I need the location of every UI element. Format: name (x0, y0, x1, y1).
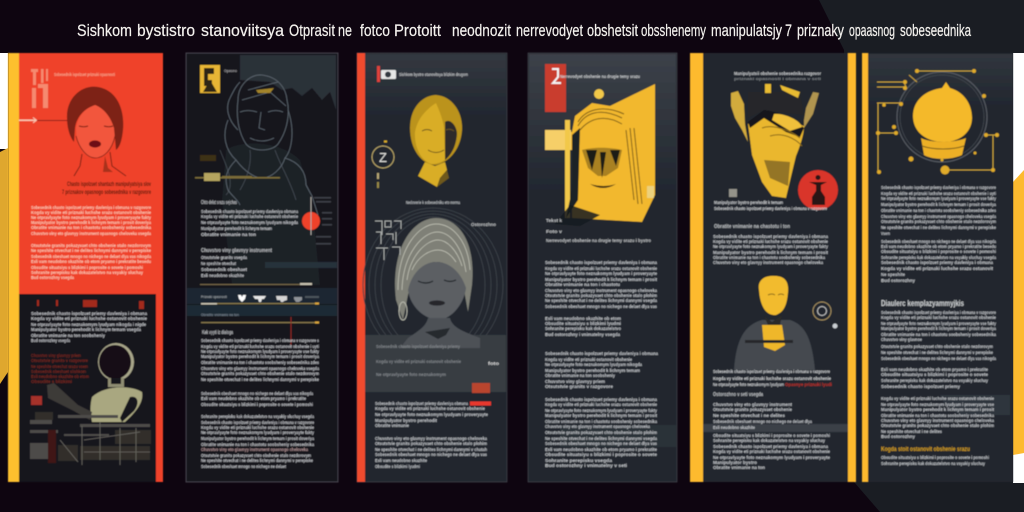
illustration: woman portrait (67, 87, 126, 176)
panel 5 caption: Manipulyator bystro perehodit k temam (714, 200, 783, 206)
panel 1 text block: Manipulyator bystro perehodit k lichnym temam i prosit doveriya (31, 220, 151, 226)
panel 5 lower text block: Esli neudobno skazhite (713, 425, 755, 431)
panel 1 red text block: Otsutstvie granits v razgovore (31, 358, 88, 364)
panel 5 lower text block: Ne otpravlyayte foto neznakomym lyudyam i proveryayte (713, 455, 830, 461)
panel 6 text block top: Otsutstvie granits pokazyvaet chto obshenie stalo nezdorovym (881, 219, 996, 225)
panel 1 dark text block: Obratite vnimanie na ton soobsheniy (31, 333, 105, 339)
panel 3 text block: Ne otpravlyayte foto neznakomym lyudyam i proveryayte (375, 412, 488, 418)
yellow glitch band (195, 155, 280, 181)
panel 2 subheading two: Chuvstvo viny glavnyy instrument (201, 248, 272, 254)
panel 2 article text: Obsudite situatsiyu s blizkimi i poprosite o sovete i pomoshi (201, 402, 313, 408)
panel 2 article text: Sobesednik chasto ispolzuet priemy davleniya i obmana v razgovore s (201, 338, 319, 344)
panel 2 article text: Sobesednik obeshaet mnogo no nichego ne delaet (201, 464, 286, 470)
panel 6 text block top: Ne speshite otvechat i ne delites lichnymi dannymi v perepiske (881, 225, 996, 231)
panel 5 header text: Manipulyatsii obshenie sobesednika razgovor (734, 71, 821, 76)
panel 4 text block: Chuvstvo viny eto glavnyy instrument opasnogo cheloveka (545, 424, 650, 430)
icon: red banner with symbol (545, 64, 566, 112)
panel 1 text block: Sobesednik obeshaet mnogo no nichego ne delaet dlya vas nikogda (31, 254, 151, 260)
title: fotco (360, 21, 390, 40)
panel 4 text block: Esli vam neudobno skazhite ob etom (545, 316, 621, 322)
panel 4 text block: Ne speshite otvechat i ne delites lichnymi dannymi vsegda (545, 298, 657, 304)
title: priznaky (797, 21, 844, 40)
background diagonal shape (819, 0, 1024, 512)
panel 3 text block (375, 401, 488, 470)
panel 2 article text: Esli vam neudobno skazhite ob etom pryamo i prekratite (201, 396, 306, 402)
panel 6 text block top: Bud ostorozhny (881, 278, 915, 284)
panel 3 header text: Sishkom bystro stanovitsya blizkim drugom (399, 72, 468, 77)
panel 6 text block bottom: Sohranite perepisku kak dokazatelstvo na vsyakiy sluchay (881, 378, 988, 384)
panel 1 dark text block: Bud ostorozhny vsegda (31, 338, 70, 344)
panel 2 article text: Sohranite perepisku kak dokazatelstvo na vsyakiy sluchay vsegda (201, 414, 314, 420)
illustration: yellow face (410, 95, 462, 187)
panel 4 text block (545, 260, 658, 469)
icon: pale logo (31, 69, 48, 108)
panel 1 red text block: Sobesednik obeshaet slishkom (31, 369, 86, 375)
panel 4 text block: Kogda vy vidite eti priznaki luchshe srazu ostanovit obshenie (545, 266, 657, 272)
panel 2 article text: Sobesednik chasto ispolzuet priemy davleniya i obmana v razgovore (201, 420, 314, 426)
panel 3: two portraits (357, 53, 507, 482)
panel 5 lower text block (713, 402, 830, 471)
panel 1 red text block: Chuvstvo viny glavnyy priem (31, 353, 81, 359)
panel 4 caption (546, 218, 651, 243)
panel 5 text block (713, 234, 828, 266)
panel 2 heading: Kak vyyti iz dialoga (202, 330, 234, 336)
panel 2 article text: Manipulyator bystro perehodit k lichnym temam i prosit doveriya (201, 354, 319, 360)
panel 1 dark text block (31, 311, 147, 344)
panel 5 lower text block: Chuvstvo viny eto glavnyy instrument (713, 402, 792, 408)
panel 1 header text: Sobesednik ispolzuet priznaki opasnosti (54, 72, 115, 77)
panel 1 dark text block: Kogda vy vidite eti priznaki luchshe ostanovit obshenie (31, 316, 147, 322)
panel 1 text block: Ne otpravlyayte foto neznakomym lyudyam i proveryayte fakty (31, 215, 151, 221)
panel 5 lower text block: Kogda vy vidite eti priznaki luchshe srazu ostanovit obshenie (713, 449, 830, 455)
panel 6 text block bottom: Ne speshite otvechat i ne delites lichnymi dannymi v perepiske (881, 350, 993, 356)
panel 2 article text: Ne otpravlyayte foto neznakomym lyudyam i proveryayte fakty (201, 430, 314, 436)
panel 2 text block: Ne otpravlyayte foto neznakomym lyudyam nikogda (201, 220, 298, 226)
panel 1 lower dark section (19, 294, 156, 482)
panel 3 text block: Sobesednik obeshaet mnogo no nichego ne delaet dlya vas (375, 452, 487, 458)
panel 6: lightbulb circuit (862, 53, 1013, 482)
title: sobeseednika (900, 21, 971, 40)
panel 1 text block: Otsutstvie granits pokazyvaet chto obshenie stalo nezdorovym (31, 243, 151, 249)
portrait overlay text: Kogda vy vidite eti priznaki ostanovit obshenie (376, 359, 462, 364)
panel 2 article text: Ne otpravlyayte foto neznakomym lyudyam i proveryayte vse fakty (201, 349, 319, 355)
panel 3 text block: Otsutstvie granits pokazyvaet chto obshenie stalo plohim (375, 441, 487, 447)
portrait overlay text (376, 344, 500, 377)
title: Sishkom (77, 21, 132, 40)
panel 6 text block bottom: Otsutstvie granits pokazyvaet chto obshenie stalo plohim (881, 423, 994, 429)
panel 5 text block: Ne otpravlyayte foto neznakomym lyudyam i proveryayte fakty (713, 244, 828, 250)
panel 3 text block: Sobesednik chasto ispolzuet priemy davleniya obmana (375, 401, 468, 407)
panel 2 text block: Manipulyator perehodit k lichnym temam (201, 226, 272, 232)
red highlight (470, 402, 491, 406)
panel 4: yellow collage (528, 53, 677, 482)
panel 4 text block: Manipulyator bystro perehodit k lichnym temam (545, 368, 640, 374)
panel 1 heading (62, 182, 151, 196)
panel 6 text block bottom: Sobesednik chasto ispolzuet priemy (881, 384, 960, 390)
panel 4 text block: Obratite vnimanie na ton i chastotu soobsheniy sobesednika (545, 419, 657, 425)
panel 4 text block: Ne otpravlyayte foto neznakomym lyudyam nikogda (545, 362, 642, 368)
panel 5 text block: Sobesednik chasto ispolzuet priemy davleniya i obmana (713, 234, 828, 240)
title: 7 (785, 21, 792, 40)
panel 5 lower text block: Ne speshite otvechat i ne delites (713, 413, 785, 419)
panel 2 short text: Ne speshite otvechat (201, 261, 236, 267)
panel 5 lower text block: Sobesednik obeshaet mnogo no nichego ne delaet dlya (713, 419, 812, 425)
panel 5 lower text block: Otsutstvie granits pokazyvaet obshenie (713, 407, 792, 413)
title: obsshenemy (641, 21, 706, 40)
panel 4 caption: Foto v (546, 229, 563, 234)
panel 5 caption: Sobesednik chasto ispolzuet priemy davleniya i obmana v razgovore (714, 206, 827, 212)
panel 1 red text block: Esli neudobno skazhite ob etom (31, 374, 89, 380)
panel 4 text block: Otsutstvie granits v razgovore (545, 384, 613, 390)
panel 6 text block bottom: Manipulyator bystro perehodit k lichnym temam i prosit (881, 407, 994, 413)
panel 6 text block top: Kogda vy vidite eti priznaki luchshe srazu ostanovit (881, 266, 993, 272)
panel 5 lower text block: Sobesednik chasto ispolzuet priemy davleniya i obmana (713, 444, 828, 450)
right edge decoration (1013, 53, 1024, 483)
illustration: bulb with circuit lines (876, 69, 999, 174)
panel 4 text block: Manipulyator bystro perehodit k lichnym temam i prosit (545, 277, 657, 283)
panel 5 lower caption: Opasnye priznaki lyudi (785, 382, 832, 388)
panel 6 text block top (881, 185, 996, 284)
panel 2 text block: Sobesednik chasto ispolzuet priemy davleniya obmana (201, 209, 298, 215)
panel 1 text block: Ne speshite otvechat i ne delites lichnymi dannymi v perepiske (31, 248, 151, 254)
grey band (703, 424, 848, 432)
panel 5 lower caption: Kogda vy vidite eti priznaki luchshe srazu ostanovit obshenie (713, 376, 831, 382)
panel 4 text block: Manipulyator bystro perehodit k lichnym temam i prosit (545, 413, 657, 419)
panel 5 lower text block: Obsudite situatsiyu s blizkimi i poprosite o sovete i pomoshi (713, 433, 830, 439)
title: bystistro (137, 21, 195, 40)
panel 4 text block: Obsudite situatsiyu s blizkimi lyudmi (545, 321, 621, 327)
panel 3 text block: Obratite vnimanie (375, 423, 409, 429)
panel 2 article text: Ne speshite otvechat i ne delites lichnymi dannymi v perepiske (201, 458, 313, 464)
panel 3 text block: Manipulyator bystro perehodit (375, 418, 437, 424)
portrait side label: Ostorozhno (471, 222, 496, 227)
panel 2 article text: Ne speshite otvechat i ne delites lichnymi dannymi v perepiske (201, 377, 319, 383)
panel 4 text block: Otsutstvie granits pokazyvaet chto obshenie stalo plohim (545, 293, 657, 299)
title: Protoitt (394, 21, 441, 40)
panel 4 text block: Sobesednik chasto ispolzuet priemy davleniya i obmana (545, 260, 657, 266)
panel 2 short text (201, 255, 247, 279)
panel 2 small label: Opasno (224, 68, 237, 73)
panel 1 text block: Sobesednik chasto ispolzuet priemy davleniya i obmana v razgovore (31, 205, 151, 211)
panel 3 text block: Obsudite s blizkimi lyudmi (375, 464, 420, 470)
panel 6 text block top: Obsudite situatsiyu s blizkimi i poprosite o sovete i pomoshi (881, 249, 996, 255)
panel 3 text block: Chuvstvo viny eto glavnyy instrument opasnogo cheloveka (375, 436, 487, 442)
panel 1: red portrait (8, 53, 163, 482)
panel 1 text block: Esli vam neudobno skazhite ob etom pryamo i prekratite besedu (31, 259, 151, 265)
title: Otprasit (289, 21, 335, 40)
panel 1 red text block (31, 353, 89, 385)
title: ne (338, 21, 352, 40)
illustration: masked head (731, 84, 819, 198)
panel 4 text block: Chuvstvo viny eto glavnyy instrument opasnogo cheloveka (545, 288, 657, 294)
panel 4 text block: Sobesednik obeshaet mnogo no nichego ne delaet dlya vas (545, 441, 657, 447)
panel 4 text block: Ne otpravlyayte foto neznakomym lyudyam i proveryayte (545, 271, 657, 277)
red target marker (302, 197, 332, 244)
panel 6 text block bottom: Kogda vy vidite eti priznaki luchshe srazu ostanovit obshenie (881, 315, 996, 321)
panel 4 text block: Sobesednik obeshaet mnogo no nichego ne delaet dlya vas (545, 304, 657, 310)
panel 5 text block: Obratite vnimanie na ton i chastotu soobsheniy sobesednika (713, 255, 825, 261)
panel 5 text block: Chuvstvo viny eto glavnyy instrument opasnogo cheloveka (713, 260, 823, 266)
panel 6 text block bottom: Chuvstvo viny glavnoe (881, 337, 922, 343)
panel 4 text block: Ne speshite otvechat i ne delites lichnymi dannymi vsegda (545, 436, 657, 442)
panel 4 text block: Ne otpravlyayte foto neznakomym lyudyam i proveryayte fakty (545, 408, 657, 414)
panel 2 article text: Otsutstvie granits pokazyvaet chto obshenie stalo nezdorovym (201, 371, 319, 377)
illustration: collage face (545, 84, 655, 226)
panel 2 short text: Sobesednik obeshaet (201, 267, 247, 273)
panel 3 text block: Ne speshite otvechat i ne delites lichnymi dannymi v chatah (375, 447, 487, 453)
panel 5 subheading: Obratite vnimanie na chastotu i ton (714, 224, 790, 230)
panel 1 dark text block: Manipulyator bystro perehodit k lichnym temam vsegda (31, 327, 141, 333)
panel 5 lower text block: Sohranite perepisku kak dokazatelstvo na vsyakiy sluchay (713, 438, 825, 444)
panel 2 article text: Obratite vnimanie na ton i chastotu soobsheniy sobesednika (201, 442, 314, 448)
icon band: Obratite vnimanie na ton (201, 313, 240, 317)
panel 5 lower text block: Manipulyator bystro (713, 460, 757, 466)
panel 1 text block: Obratite vnimanie na ton i chastotu soobsheniy sobesednika (31, 225, 151, 231)
panel 1 heading: Chasto ispolzuet shantazh manipulyatsiya slov (67, 182, 151, 188)
portrait overlay text: Sobesednik chasto ispolzuet davleniya priemy (376, 344, 461, 349)
panel 4 text block: Bud ostorozhny i vnimatelny vsegda (545, 332, 620, 338)
panel 4 text block: Obratite vnimanie na ton i chastotu (545, 282, 620, 288)
panel 1 text block: Bud ostorozhny vsegda (31, 275, 74, 281)
panel 4 text block: Sohranite perepisku kak dokazatelstvo (545, 326, 621, 332)
panel 2 article text (201, 338, 319, 470)
panel 4 caption: Nerrevodyet obshenie na drugie temy srazu i bystro (546, 238, 651, 243)
icon: red circle with figure (798, 170, 838, 210)
title: manipulatsjy (711, 21, 782, 40)
panel 2 text block: Kogda vy vidite eti priznaki luchshe ostanovit obshenie (201, 214, 298, 220)
panel 2 text block: Obratite vnimanie na ton (201, 232, 256, 238)
icon: spark (832, 324, 838, 328)
illustration: yellow person (734, 276, 815, 370)
panel 4 header text: Nerrevodyet obshenie na drugie temy srazu (560, 74, 640, 79)
panel 4 text block: Chuvstvo viny glavnyy priem (545, 379, 605, 385)
panel 1 dark text block: Ne otpravlyayte foto neznakomym lyudyam nikogda i nigde (31, 322, 146, 328)
panel 6 text block bottom: Obsudite situatsiyu s blizkimi i poprosite o sovete (881, 372, 988, 378)
illustration: sketched face (220, 75, 318, 215)
panel 5 text block: Kogda vy vidite eti priznaki luchshe srazu ostanovit obshenie (713, 239, 828, 245)
panel 2 article text: Manipulyator bystro perehodit k lichnym temam i prosit doveriya (201, 436, 314, 442)
left edge decoration (0, 53, 8, 384)
panel 4 caption: Tekst k (546, 218, 562, 223)
panel 5 lower text block: Obratite vnimanie na ton (713, 465, 765, 471)
icon: numbered circle (372, 140, 394, 188)
panel 2 article text: Kogda vy vidite eti priznaki luchshe srazu ostanovit obshenie i uyti (201, 344, 319, 350)
panel 2 article text: Chuvstvo viny eto glavnyy instrument opasnogo cheloveka (201, 447, 308, 453)
panel 6 text block bottom: Obratite vnimanie na ton i chastotu soobsheniy sobesednika (881, 413, 994, 419)
panel 1 text block (31, 205, 151, 281)
panel 2 short text: Esli neudobno skazhite (201, 273, 244, 279)
panel 6 closing text: Sohranite perepisku kak dokazatelstvo na vsyakiy sluchay (881, 461, 985, 467)
grey streak (940, 395, 1010, 415)
panel 1 red marks (37, 300, 144, 309)
icon: numbered circle: Z (379, 150, 387, 165)
panel 6 text block bottom: Chuvstvo viny eto glavnyy instrument opasnogo cheloveka (881, 418, 994, 424)
panel 6 text block bottom: Obratite vnimanie na ton i chastotu soobsheniy sobesednika (881, 332, 996, 338)
panel 1 red text block: Ne speshite otvechat srazu vsem (31, 364, 88, 370)
portrait caption: Nedoverie k sobesedniku eto norma (406, 200, 460, 205)
panel 1 dark text block: Sobesednik chasto ispolzuet priemy davleniya i obmana (31, 311, 147, 317)
panel 3 text block: Kogda vy vidite eti priznaki luchshe ostanovit obshenie (375, 406, 485, 412)
panel 6 closing text (881, 455, 989, 467)
panel 4 text block: Obratite vnimanie na ton soobsheniy (545, 373, 615, 379)
panel 1 text block: Chuvstvo viny eto glavnyy instrument opasnogo cheloveka vsegda (31, 231, 151, 237)
panel 6 text block top: Esli vam neudobno skazhite ob etom pryamo i prekratite besedu (881, 244, 996, 250)
title: neodnozit (452, 21, 511, 40)
icon: camera with red bar (377, 66, 396, 82)
icon: yellow emblem (200, 65, 220, 93)
panel 5 subheading two: Ostorozhno v seti vsegda (713, 392, 764, 398)
panel 5 header text (734, 71, 821, 81)
panel 6 text block top: Ne speshite (881, 272, 905, 278)
panel 2 subheading: Chto delat srazu sejchas (201, 200, 237, 206)
panel 6 yellow heading: Kogda stoit ostanovit obshenie srazu (881, 447, 970, 453)
portrait overlay text: foto (488, 361, 500, 366)
icon band: Priznaki opasnosti (201, 294, 227, 299)
panel 6 heading: Diaulerc kemplazyammyjkis (881, 299, 964, 308)
icon: target ring (813, 302, 831, 320)
panel 1 red text block: Obsudite s blizkimi (31, 379, 72, 385)
panel 5: yellow mask and person (690, 53, 856, 482)
panel 5 header text: priznaki opasnosti i obmana v seti (734, 77, 821, 81)
portrait overlay text: Ne otpravlyayte foto neznakomym (376, 372, 446, 377)
icon: red badge (31, 396, 42, 405)
title: opaasnog (849, 21, 895, 40)
title: nerrevodyet (516, 21, 583, 40)
panel 6 text block bottom: Ne otpravlyayte foto neznakomym lyudyam i proveryayte vse (881, 402, 994, 408)
panel 1 text block: Kogda vy vidite eti priznaki luchshe srazu ostanovit obshenie (31, 210, 151, 216)
panel 4 text block: Otsutstvie granits pokazyvaet chto obshenie stalo plohim (545, 430, 657, 436)
panel 2 article text: Sobesednik obeshaet mnogo no nichego ne delaet dlya vas nikogda (201, 391, 313, 397)
panel 6 text block bottom: Kogda vy vidite eti priznaki luchshe srazu ostanovit obshenie (881, 396, 994, 402)
panel 6 text block top: Sobesednik chasto ispolzuet priemy davleniya i obmana (881, 260, 993, 266)
panel 6 closing text: Obsudite situatsiyu s blizkimi i poprosite o sovete i pomoshi (881, 455, 989, 461)
panel 2 article text: Chuvstvo viny eto glavnyy instrument opasnogo cheloveka vsegda (201, 366, 319, 372)
illustration: seated figure and machinery (30, 343, 151, 465)
icon: arrow (19, 118, 67, 123)
panel 5 text block: Manipulyator bystro perehodit k lichnym temam i prosit (713, 250, 828, 256)
panel 4 text block: Kogda vy vidite eti priznaki luchshe srazu ostanovit obshenie (545, 402, 657, 408)
panel 5 lower caption: Ne otpravlyayte foto neznakomym lyudyam (713, 382, 784, 388)
panel 5 caption (714, 200, 827, 212)
illustration: grey portrait with rings (363, 208, 506, 392)
panel 4 text block: Sobesednik chasto ispolzuet priemy davleniya i obmana (545, 397, 657, 403)
title: obshetsit (587, 21, 638, 40)
panel 4 text block: Bud ostorozhny i vnimatelny v seti (545, 463, 627, 469)
panel 4 text block: Sobesednik chasto ispolzuet priemy davleniya i obmana (545, 351, 658, 357)
panel 3 text block: Esli vam neudobno skazhite (375, 458, 427, 464)
red label (472, 383, 490, 393)
panel 4 text block: Kogda vy vidite eti priznaki ostanovit obshenie (545, 357, 632, 363)
panel 4 text block: Esli vam neudobno skazhite ob etom pryamo i prekratite (545, 447, 657, 453)
panel 5 lower caption (713, 369, 832, 388)
panel 6 text block bottom: Ne speshite otvechat i ne delites (881, 429, 942, 435)
panel 4 text block: Obsudite situatsiyu s blizkimi i poprosite o sovete (545, 452, 657, 458)
panel 2 article text: Obratite vnimanie na ton i chastotu soobsheniy sobesednika zdes (201, 360, 319, 366)
panel 1 text block: Sohranite perepisku kak dokazatelstvo na vsyakiy sluchay (31, 270, 143, 276)
panel 6 text block top: Vsem (881, 231, 890, 237)
icon: small seal (729, 189, 737, 197)
panel 6 text block bottom: Otsutstvie granits pokazyvaet chto obshenie stalo nezdorovym (881, 344, 993, 350)
panel 2: line sketch (186, 53, 338, 482)
title (77, 21, 971, 40)
panel 6 text block bottom: Bud ostorozhny (881, 434, 915, 440)
panel 5 lower caption: Sobesednik chasto ispolzuet priemy davleniya i obmana v razgovore (713, 369, 830, 375)
title: stanoviitsya (201, 21, 285, 40)
panel 2 short text: Otsutstvie granits vsegda (201, 255, 247, 261)
panel 6 text block bottom: Esli vam neudobno skazhite ob etom pryamo i prekratite (881, 367, 988, 373)
panel 4 text block: Sohranite perepisku vsegda (545, 458, 612, 464)
panel 6 text block bottom (881, 310, 996, 440)
panel 2 text block (201, 209, 298, 238)
panel 2 article text: Kogda vy vidite eti priznaki luchshe srazu ostanovit obshenie (201, 425, 314, 431)
panel 1 heading: 7 priznakov opasnogo sobesednika v razgovore (62, 190, 151, 196)
rune-like glyph column (375, 221, 401, 260)
icon band (187, 262, 337, 345)
panel 2 article text: Otsutstvie granits pokazyvaet chto obshenie stalo nezdorovym (201, 453, 311, 459)
panel 1 text block: Obsudite situatsiyu s blizkimi i poprosite o sovete i pomoshi (31, 265, 143, 271)
